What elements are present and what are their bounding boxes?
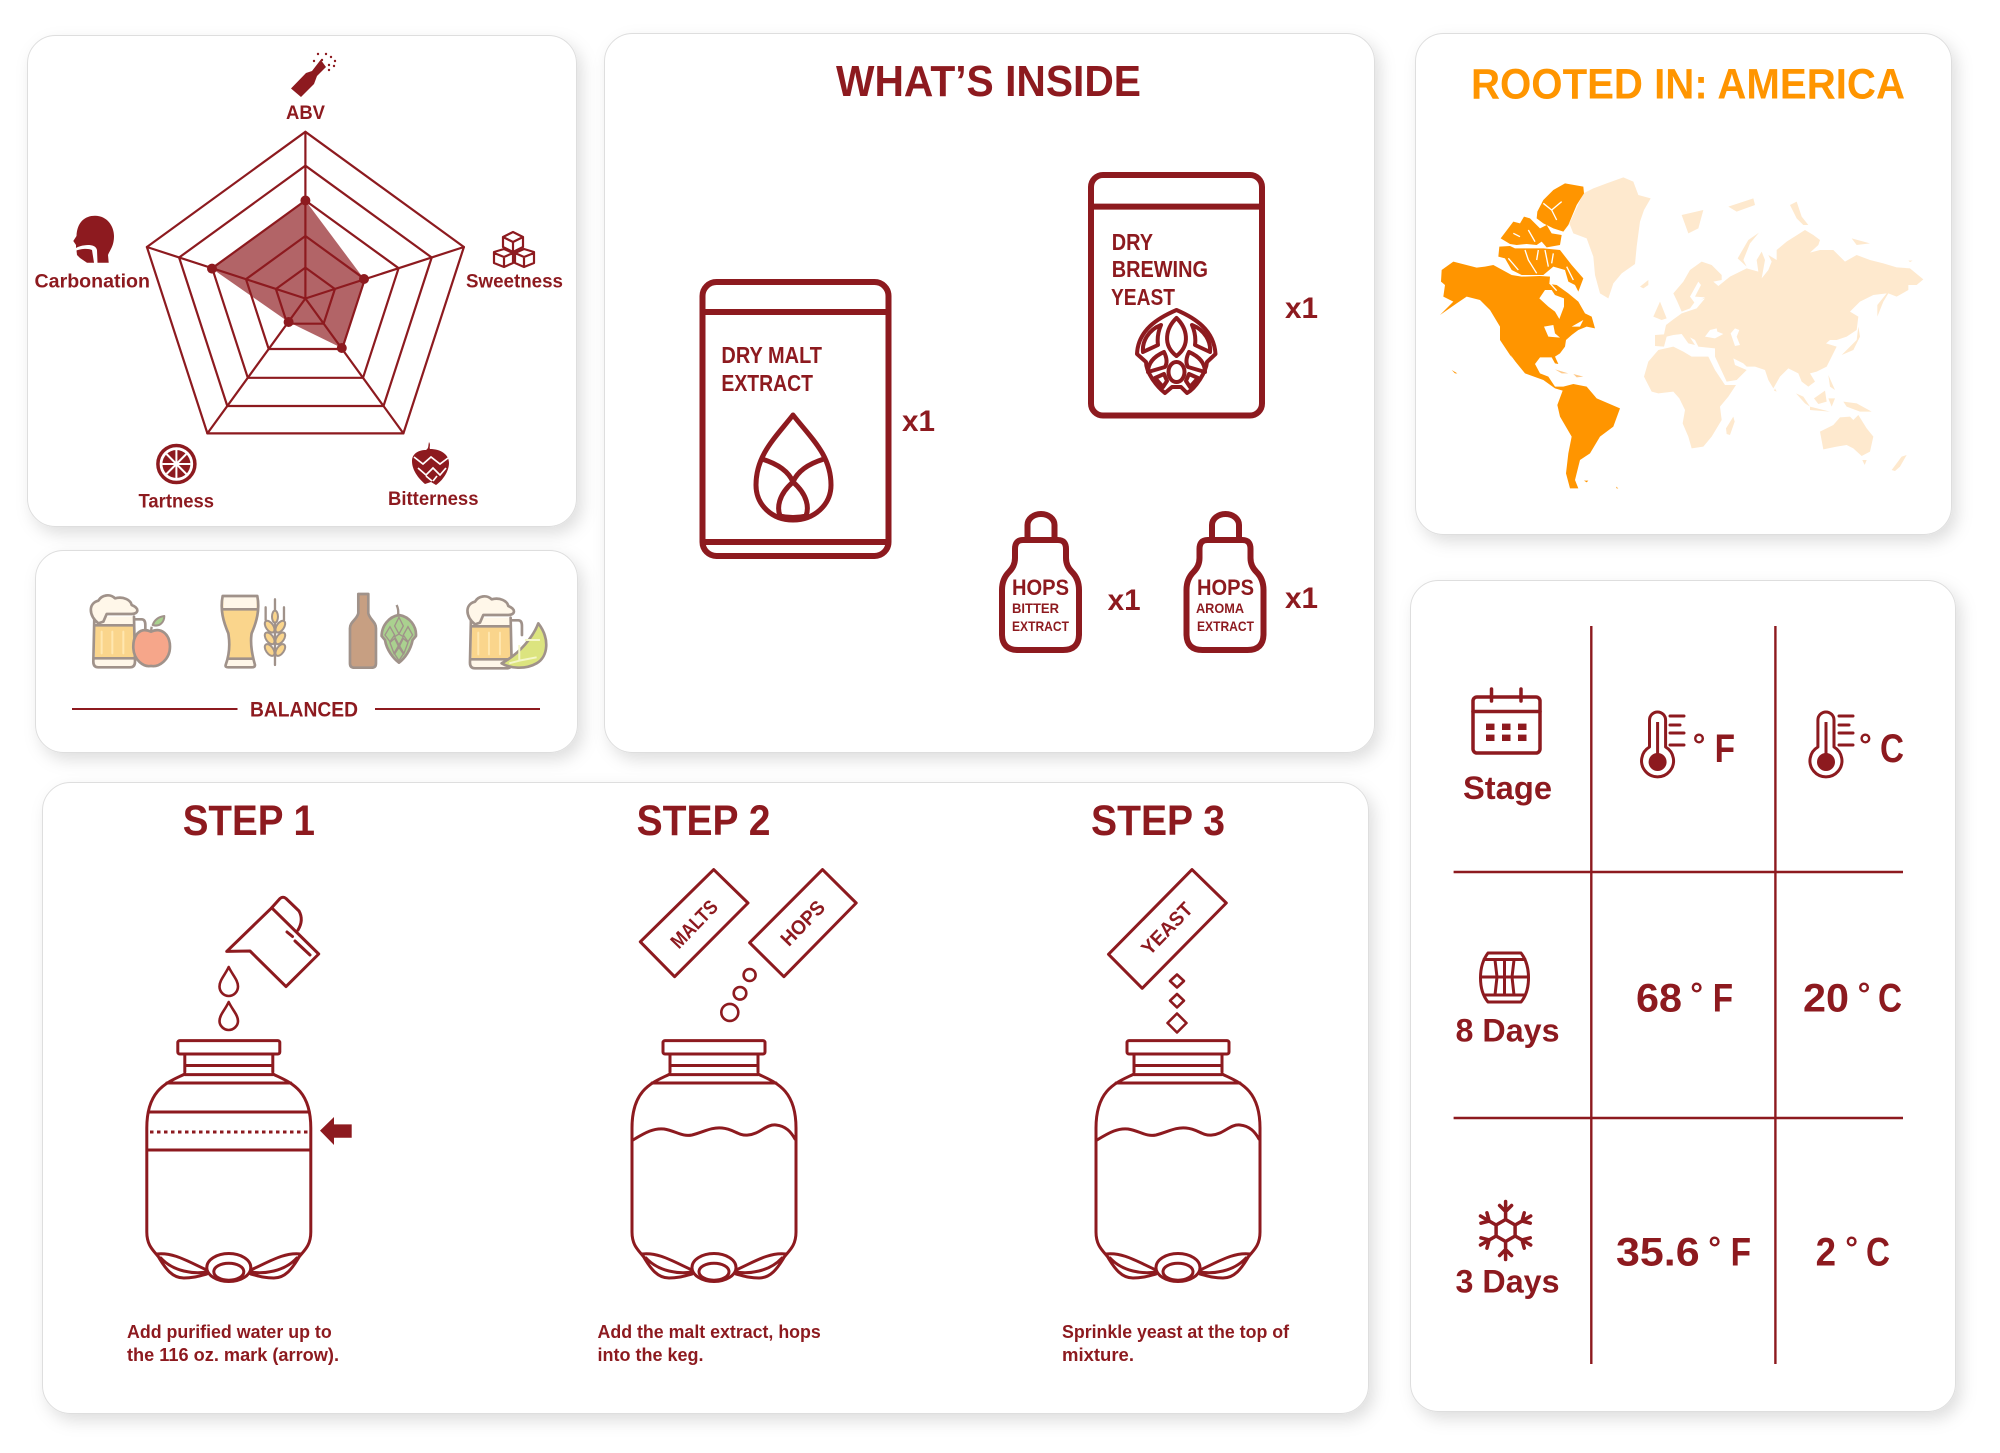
icon: hops aroma extract bottle: EXTRACT [1197,618,1254,634]
icon: dry brewing yeast bag: DRY [1112,229,1153,255]
icon: calendar [1473,689,1540,753]
label: 3 Days: 3 Days [1456,1263,1560,1299]
icon: keg with extract [632,1041,796,1282]
value: 35.6 F [1616,1230,1751,1275]
panel: rooted in America [1416,34,1952,534]
map: inland seas [1690,282,1740,346]
world map [1440,177,1923,488]
label: Bitterness: Bitterness [388,489,478,510]
map: Americas highlighted [1440,183,1620,488]
icon: dry malt extract bag: EXTRACT [721,370,813,396]
header: degrees C with thermometer [1810,712,1904,777]
text: step 2 instructions: into the keg. [598,1345,704,1365]
icon: hops packet: HOPS [777,897,830,951]
label: Stage: Stage [1463,770,1552,806]
count: malt x1: x1 [902,405,935,438]
icon: hops bitter extract bottle [1002,514,1079,650]
header: degrees C with thermometer: C [1880,727,1904,771]
icon: malts packet: MALTS [667,896,723,953]
icon: filled hop [412,442,449,485]
icon: yeast packet: YEAST [1137,899,1198,960]
value: 35.6 F: ° [1708,1230,1721,1266]
heading: step 3: STEP 3 [1091,797,1225,845]
value: 68 F: ° [1690,976,1703,1012]
label: Sweetness: Sweetness [466,272,563,292]
value: 20 C: C [1878,977,1902,1021]
icon: mug and lime [467,596,546,668]
icon: hops bitter extract bottle: EXTRACT [1012,618,1069,634]
icon: dry brewing yeast bag: YEAST [1111,284,1175,310]
label: ABV: ABV [286,103,325,124]
table grid [1454,626,1903,1364]
count: aroma x1: x1 [1285,582,1318,615]
map: Hudson bay, lakes and channels [1508,202,1583,368]
icon: water drops [220,967,238,1030]
text: step 2 instructions: Add the malt extract, hops [598,1322,821,1342]
icon: dry brewing yeast bag: BREWING [1112,256,1208,282]
panel: what's inside [604,34,1374,752]
icon: hops aroma extract bottle [1186,514,1264,650]
icon: malts packet [640,870,748,977]
radar chart [147,132,464,433]
heading: step 2: STEP 2 [637,797,770,845]
text: step 2 instructions [598,1322,821,1365]
value: 2 C [1816,1230,1890,1275]
text: step 1 instructions: Add purified water up to [127,1322,332,1342]
heading: what's inside: WHAT’S INSIDE [836,57,1141,106]
value: 20 C: 20 [1803,977,1849,1021]
label: Tartness: Tartness [138,492,214,512]
map: Caribbean islands [1555,369,1583,377]
icon: keg with yeast [1096,1041,1260,1282]
header: degrees F with thermometer: F [1715,727,1735,771]
value: 35.6 F: 35.6 [1616,1231,1700,1275]
value: 2 C: ° [1845,1230,1858,1266]
label: Carbonation: Carbonation [34,272,150,292]
header: degrees C with thermometer: ° [1859,727,1872,763]
text: step 3 instructions: mixture. [1062,1345,1134,1365]
value: 35.6 F: F [1731,1231,1751,1275]
value: 68 F: F [1713,977,1733,1021]
icon: hops bitter extract bottle: HOPS [1012,575,1069,600]
icon: glass and wheat [222,596,287,667]
icon: sugar cubes [494,232,534,267]
value: 20 C: ° [1858,976,1870,1012]
icon: dry brewing yeast bag [1090,175,1263,416]
value: 20 C [1803,976,1902,1021]
value: 2 C: C [1866,1231,1890,1275]
icon: measuring jug [227,897,319,987]
icon: snowflake [1477,1202,1534,1260]
icon: citrus slice [158,446,195,482]
icon: keg with fill mark [147,1041,311,1282]
icon: hops bitter extract bottle: BITTER [1012,600,1059,616]
count: yeast x1: x1 [1285,292,1318,325]
icon: hops aroma extract bottle: HOPS [1197,575,1254,600]
icon: dry malt extract bag [702,282,889,556]
panel: fermentation table [1410,580,1956,1412]
header: degrees F with thermometer [1642,712,1735,777]
label: 8 Days: 8 Days [1456,1013,1560,1049]
panel: balanced style [36,550,578,752]
value: 2 C: 2 [1816,1231,1836,1275]
value: 68 F: 68 [1636,977,1682,1021]
icon: falling bubbles [721,969,756,1021]
arrow: fill level [320,1117,352,1145]
text: step 3 instructions [1062,1322,1290,1365]
icon: head and throat [73,216,114,263]
heading: rooted in america: ROOTED IN: AMERICA [1471,61,1905,109]
icon: hops packet [750,870,856,977]
label: BALANCED: BALANCED [250,699,358,722]
icon: falling yeast granules [1168,974,1186,1032]
radar data polygon [207,196,369,353]
icon: yeast packet [1108,870,1226,988]
count: bitter x1: x1 [1108,584,1141,617]
heading: step 1: STEP 1 [183,797,315,845]
panel: flavour radar [28,36,576,526]
icon: bottle and hop [350,594,416,668]
header: degrees F with thermometer: ° [1693,727,1705,763]
panel: steps [42,782,1368,1414]
map: rest of the world in pale tint [1569,177,1923,471]
value: 68 F [1636,976,1733,1021]
text: step 1 instructions: the 116 oz. mark (arrow). [127,1345,339,1365]
text: step 1 instructions [127,1322,339,1365]
text: step 3 instructions: Sprinkle yeast at the top of [1062,1322,1290,1342]
icon: bottle with spray [291,53,336,97]
icon: mug and apple [91,595,170,667]
icon: dry malt extract bag: DRY MALT [721,342,822,368]
icon: barrel [1480,953,1528,1002]
icon: hops aroma extract bottle: AROMA [1196,600,1244,616]
